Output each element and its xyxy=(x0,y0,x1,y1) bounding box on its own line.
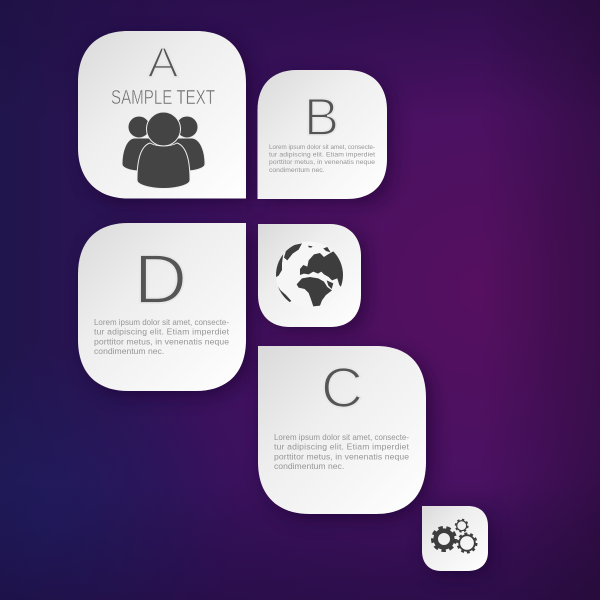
body text C: condimentum nec. xyxy=(274,461,344,471)
body text B: condimentum nec. xyxy=(269,167,325,174)
body text B: porttitor metus, in venenatis neque xyxy=(269,159,375,166)
body text D: tur adipiscing elit. Etiam imperdiet xyxy=(94,326,230,336)
body text B: Lorem ipsum dolor sit amet, consecte- xyxy=(269,144,375,151)
body text C: porttitor metus, in venenatis neque xyxy=(274,452,409,462)
letter B: B xyxy=(304,88,339,147)
panel A xyxy=(78,31,252,204)
body text D: condimentum nec. xyxy=(94,346,164,356)
icon: people group xyxy=(122,112,205,188)
panel: gears xyxy=(422,506,493,577)
icon: gears xyxy=(432,520,476,552)
panel C xyxy=(258,346,432,520)
sample text heading: SAMPLE TEXT xyxy=(111,87,215,109)
icon: globe xyxy=(276,242,343,306)
letter A: A xyxy=(148,39,179,87)
letter D: D xyxy=(134,240,187,318)
body text C xyxy=(274,432,410,471)
panel B xyxy=(258,70,392,204)
panel: globe xyxy=(258,224,367,333)
body text D: porttitor metus, in venenatis neque xyxy=(94,336,229,346)
body text D: Lorem ipsum dolor sit amet, consecte- xyxy=(94,317,229,327)
body text C: Lorem ipsum dolor sit amet, consecte- xyxy=(274,432,409,442)
body text B xyxy=(269,144,375,174)
body text C: tur adipiscing elit. Etiam imperdiet xyxy=(274,442,410,452)
letter C: C xyxy=(321,356,363,420)
panel D xyxy=(78,223,252,396)
body text B: tur adipiscing elit. Etiam imperdiet xyxy=(269,152,375,158)
body text D xyxy=(94,317,230,356)
